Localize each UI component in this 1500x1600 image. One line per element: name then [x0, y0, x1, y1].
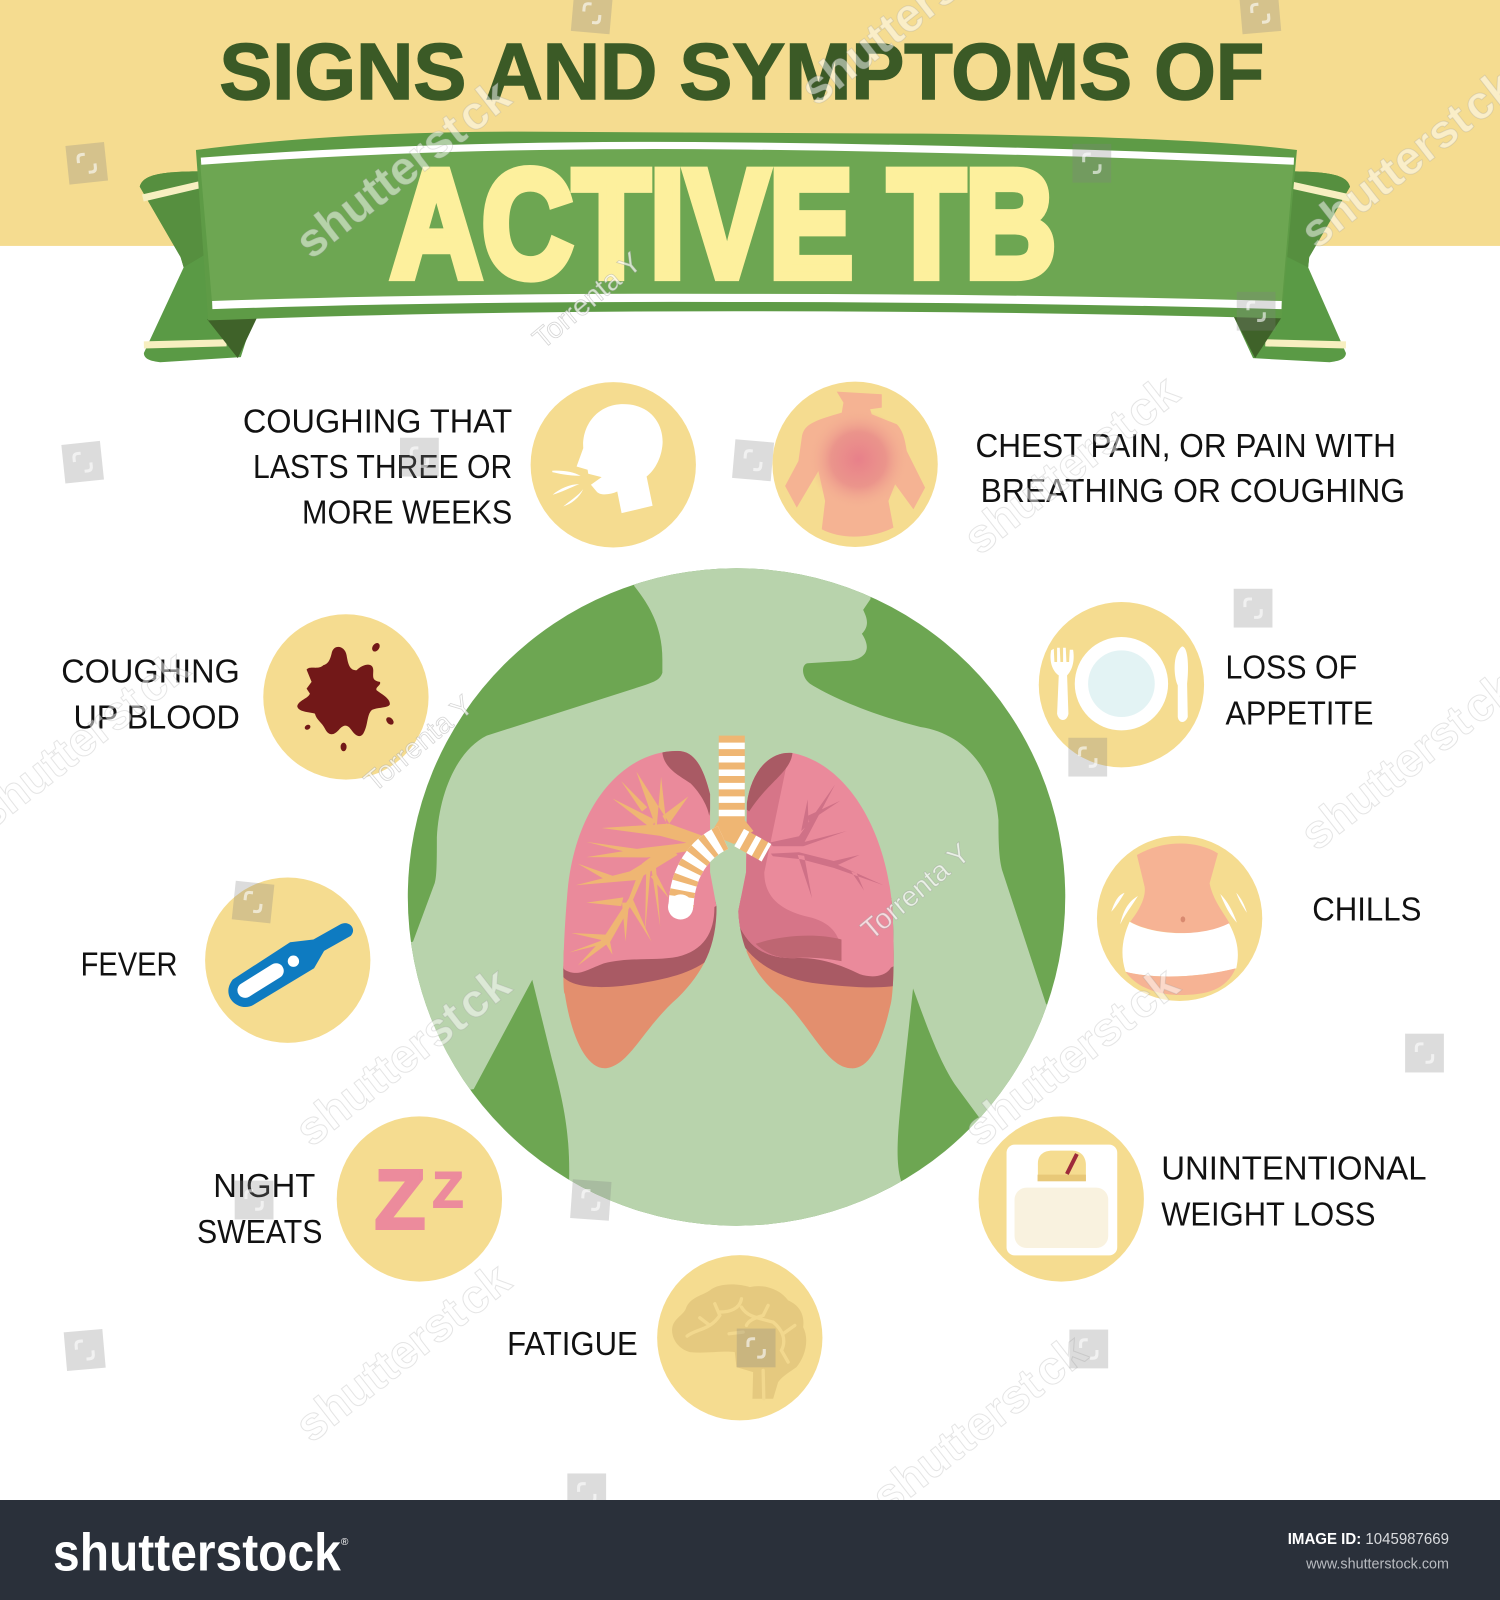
watermark overlay: Torrenta Y	[358, 689, 480, 798]
icon: blood splatter	[263, 614, 429, 780]
item: coughing up blood	[61, 614, 429, 780]
icon: sleeping Z	[337, 1116, 502, 1282]
trachea and bronchi	[668, 736, 766, 920]
label: chills: CHILLS	[1312, 891, 1421, 928]
icon: plate with cutlery	[1039, 602, 1204, 767]
watermark overlay: shutterst ck	[285, 1252, 520, 1452]
ribbon main band	[196, 132, 1297, 320]
label: coughing up blood: COUGHING	[61, 654, 240, 691]
label: night sweats: SWEATS	[197, 1214, 322, 1251]
item: night sweats	[197, 1116, 502, 1282]
label: weight loss: WEIGHT LOSS	[1161, 1197, 1376, 1234]
item: chest pain	[772, 382, 1405, 547]
label: coughing: COUGHING THAT	[243, 404, 512, 441]
label: chest pain	[976, 428, 1405, 510]
label: chest pain: CHEST PAIN, OR PAIN WITH	[976, 428, 1396, 465]
footer url: www.shutterstock.com	[1305, 1556, 1449, 1572]
label: night sweats	[197, 1168, 322, 1251]
header band	[0, 0, 1500, 246]
item: chills	[1097, 836, 1421, 1001]
left bronchial tree	[569, 772, 701, 965]
item: unintentional weight loss	[979, 1116, 1427, 1282]
right bronchial tree	[769, 785, 884, 898]
icon: thermometer	[205, 878, 370, 1043]
icon: brain	[657, 1255, 822, 1420]
icon: weighing scale	[979, 1116, 1144, 1282]
icon: sleeping Z: Z	[374, 1152, 426, 1247]
ribbon banner	[140, 132, 1350, 362]
watermark overlay: Torrenta Y	[527, 246, 648, 355]
watermark overlay: shutterst ck	[954, 956, 1189, 1156]
watermark overlay: shutterst ck	[285, 956, 520, 1156]
label: night sweats: NIGHT	[213, 1168, 315, 1205]
left lung	[563, 750, 716, 1068]
item: fatigue	[507, 1255, 822, 1420]
label: coughing: LASTS THREE OR	[253, 449, 512, 486]
icon: sleeping Z: Z	[433, 1162, 463, 1218]
icon: coughing head	[531, 382, 696, 547]
banner heading: ACTIVE TB: ACTIVE TB	[391, 139, 1056, 310]
green circle	[408, 568, 1065, 1226]
label: coughing up blood: UP BLOOD	[73, 700, 240, 737]
watermark overlay: shutterst ck	[285, 68, 520, 268]
footer bar	[0, 1500, 1500, 1600]
label: weight loss	[1161, 1151, 1427, 1234]
watermark overlay: shutterst ck	[954, 364, 1189, 564]
icon: torso with chest glow	[772, 382, 938, 547]
body silhouette	[411, 568, 1048, 1226]
title: SIGNS AND SYMPTOMS OF	[219, 27, 1264, 116]
footer logo: shutterstock	[53, 1523, 341, 1582]
right lung	[738, 752, 894, 1068]
label: coughing	[243, 404, 512, 531]
label: chest pain: BREATHING OR COUGHING	[981, 473, 1405, 510]
label: loss of appetite: APPETITE	[1226, 695, 1373, 732]
item: loss of appetite	[1039, 602, 1373, 767]
icon: waist	[1097, 836, 1262, 1001]
label: fatigue: FATIGUE	[507, 1326, 638, 1363]
item: fever	[81, 878, 370, 1043]
label: weight loss: UNINTENTIONAL	[1161, 1151, 1427, 1188]
label: loss of appetite: LOSS OF	[1226, 650, 1357, 687]
footer logo registered mark: ®	[341, 1537, 349, 1548]
footer image id: IMAGE ID: 1045987669	[1288, 1531, 1449, 1548]
ribbon left tail	[140, 171, 257, 362]
label: coughing up blood	[61, 654, 240, 737]
label: fever: FEVER	[81, 947, 178, 984]
label: coughing: MORE WEEKS	[302, 494, 512, 531]
ribbon right tail	[1234, 171, 1350, 362]
central body illustration	[408, 568, 1066, 1226]
watermark overlay: shutterst ck	[862, 1324, 1097, 1523]
watermark overlay: Torrenta Y	[855, 837, 976, 946]
item: coughing	[243, 382, 696, 547]
label: loss of appetite	[1226, 650, 1373, 732]
